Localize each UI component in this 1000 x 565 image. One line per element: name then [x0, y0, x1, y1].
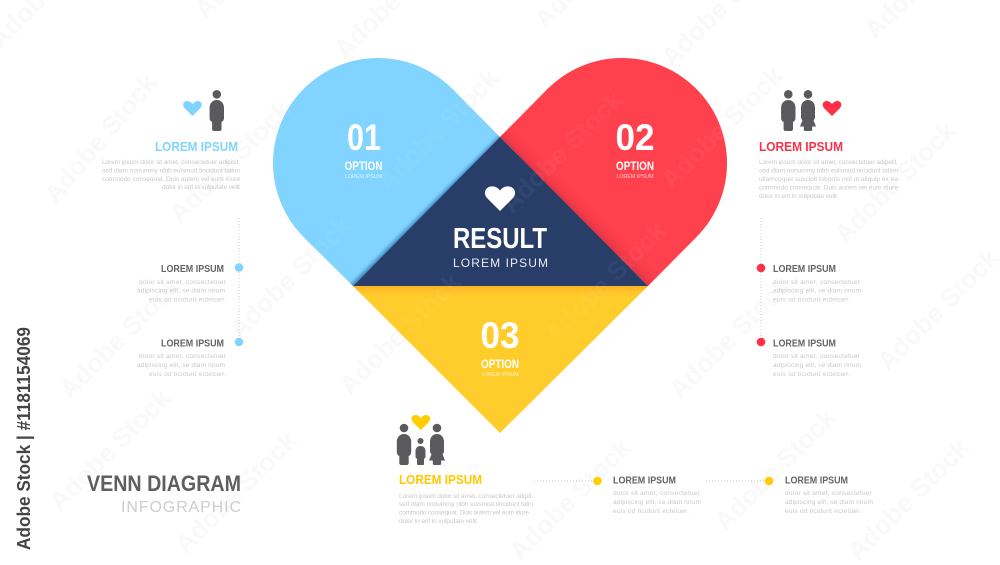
bottom item 2: dolor sit amet, consectetuer [785, 490, 873, 497]
left item 2: dolor sit amet, consectetuer [139, 353, 227, 360]
left item 1 [137, 264, 227, 304]
option 02 label [616, 117, 654, 180]
left item 2 [137, 338, 227, 378]
bottom item 2 [785, 476, 874, 515]
paragraph: bottom: commodo consequat. Duis autem vel eum iriure [399, 510, 529, 516]
icon: blue heart and person [183, 90, 224, 131]
right item 2: adipiscing elit, se diam nnum [773, 362, 862, 369]
paragraph: left [102, 159, 240, 191]
panel: option 01 blue lobe [273, 58, 500, 286]
panel: option 02 red lobe [500, 58, 727, 286]
right item 1: euis od ticidunt ectetuer. [773, 296, 850, 304]
left item 1: adipiscing elit, se diam nnum [137, 288, 226, 294]
left item 2: adipiscing elit, se diam nnum [137, 362, 226, 369]
paragraph: left: Lorem ipsum dolor sit amet, consectetuer adipisit, [102, 159, 240, 166]
left item 2: LOREM IPSUM [161, 338, 224, 350]
bottom item 1: LOREM IPSUM [613, 476, 676, 486]
left item 1: dolor sit amet, consectetuer [139, 279, 227, 286]
bottom item 1 [613, 476, 702, 515]
paragraph: right: sed diam nonummy nibh euismod tincidunt tation [759, 168, 898, 174]
panel: bottom text block [397, 415, 533, 525]
option 03 label: OPTION [481, 359, 519, 371]
option 02 label: LOREM IPSUM [616, 174, 654, 180]
right item 1 [773, 264, 862, 304]
paragraph: right: Lorem ipsum dolor sit amet, consectetuer adipelit, [759, 159, 898, 166]
paragraph: bottom: sed diam nonummy nibh euismod tincidunt tatin [399, 501, 533, 508]
bottom connector 2 [706, 477, 773, 485]
left item 2: euis od ticidunt ectetuer. [149, 371, 226, 378]
right item 2: dolor sit amet, consectetuer [773, 353, 861, 360]
panel: right text block [759, 90, 898, 200]
title: VENN DIAGRAM [87, 471, 241, 496]
icon: couple and red heart [781, 90, 841, 131]
bottom item 1: adipiscing elit, se diam nnum [613, 499, 702, 506]
option 02 label: 02 [616, 117, 654, 158]
heading: yellow: LOREM IPSUM [399, 473, 482, 487]
icon: white heart [485, 186, 515, 211]
right item 1: adipiscing elit, se diam nnum [773, 288, 862, 294]
left item 1: euis od ticidunt ectetuer. [149, 296, 226, 304]
paragraph: bottom: Lorem ipsum dolor sit amet, consectetuer adipit, [399, 493, 533, 500]
paragraph: right: commodo consequat. Duis autem vel eum iriure [759, 184, 898, 192]
option 03 label [480, 315, 520, 378]
bottom connector 1 [534, 477, 602, 485]
title [87, 471, 241, 516]
heading: red: LOREM IPSUM [759, 140, 843, 154]
result label: RESULT [453, 223, 547, 255]
panel: left text block [102, 90, 240, 191]
right item 1: LOREM IPSUM [773, 264, 836, 275]
title: INFOGRAPHIC [121, 499, 241, 516]
icon: family with yellow heart [397, 415, 445, 465]
right item 2: euis od ticidunt ectetuer. [773, 371, 850, 378]
paragraph: bottom [399, 493, 533, 525]
paragraph: bottom: dolor in erit in vulputate velit [399, 518, 477, 525]
option 01 label [344, 117, 382, 180]
left connector: dotted line and dots [235, 218, 243, 346]
option 01 label: OPTION [344, 161, 382, 173]
option 02 label: OPTION [616, 161, 654, 173]
bottom item 2: LOREM IPSUM [785, 476, 848, 486]
option 01 label: LOREM IPSUM [345, 174, 382, 180]
result label [453, 223, 548, 270]
bottom item 1: euis od ticidunt ectetuer. [613, 508, 689, 515]
heart venn diagram [273, 58, 727, 433]
right item 2: LOREM IPSUM [773, 338, 836, 350]
paragraph: right: ullamcorper suscipit lobortis nisl ut aliquip ex ea [759, 176, 898, 183]
paragraph: right [759, 159, 898, 200]
bottom item 2: adipiscing elit, se diam nnum [785, 499, 874, 506]
bottom item 1: dolor sit amet, consectetuer [613, 490, 701, 497]
left item 1: LOREM IPSUM [161, 264, 224, 275]
paragraph: right: dolor in erit in vulputate velit [759, 193, 837, 200]
result label: LOREM IPSUM [453, 256, 548, 270]
option 01 label: 01 [347, 117, 381, 158]
right item 1: dolor sit amet, consectetuer [773, 279, 861, 286]
paragraph: left: commodo consequat. Duis autem vel eum iriure [102, 176, 240, 183]
right connector: dotted line and dots [757, 218, 765, 346]
paragraph: left: sed diam nonummy nibh euismod tincidunt tation [102, 168, 240, 174]
right item 2 [773, 338, 862, 378]
heading: blue: LOREM IPSUM [155, 140, 238, 154]
option 03 label: 03 [480, 315, 520, 356]
paragraph: left: dolor in erit in vulputate velit [162, 184, 240, 191]
bottom item 2: euis od ticidunt ectetuer. [785, 508, 861, 515]
option 03 label: LOREM IPSUM [482, 372, 519, 378]
panel: option 03 yellow triangle [353, 286, 648, 433]
vertical stock credit: Adobe Stock | #1181154069 [13, 327, 34, 550]
panel: result navy triangle [353, 137, 648, 286]
